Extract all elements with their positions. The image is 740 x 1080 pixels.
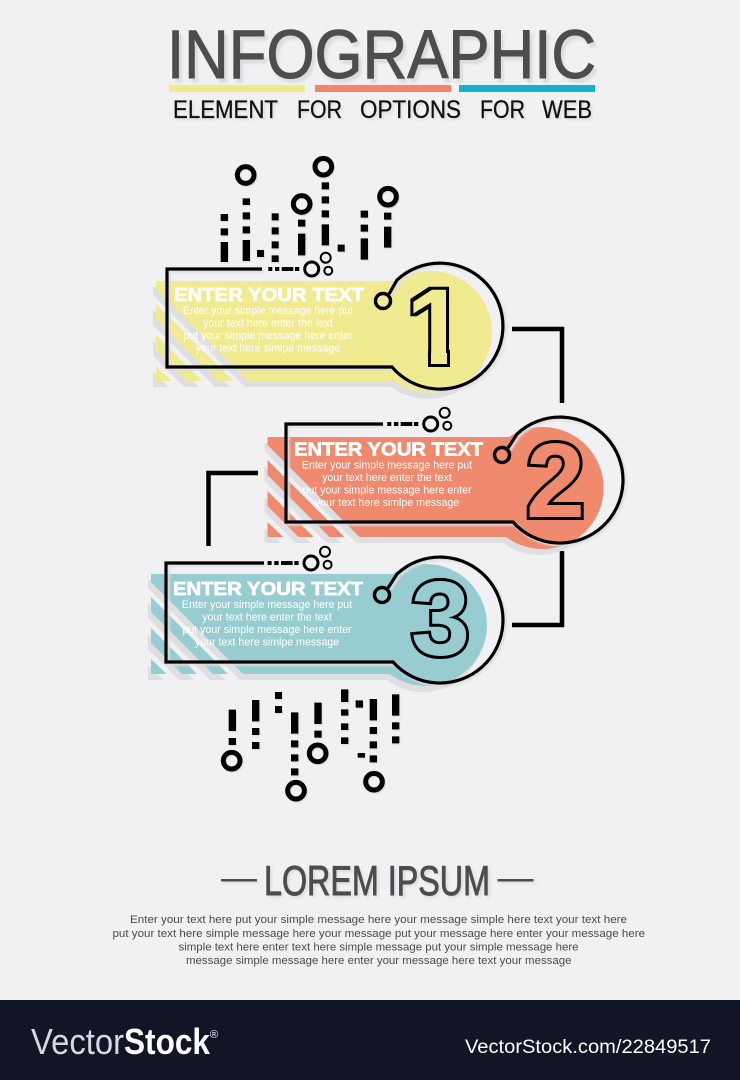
dots and bubbles [387,408,451,431]
dots and bubbles [268,547,332,570]
paragraph: simple text here enter text here simple message put your simple message here [178,942,578,954]
connector: step 1 to step 2 [512,329,562,403]
message [183,305,353,354]
paragraph: put your text here simple message here your message put your message here enter your message here [112,928,645,940]
node circle [374,588,390,602]
bottom dotted ornament with rings [223,689,399,799]
message [182,599,352,648]
footer image id: VectorStock.com/22849517 [465,1036,711,1058]
footer logo: Vector [31,1021,124,1062]
heading: ENTER YOUR TEXT [174,284,365,305]
message [302,460,472,509]
subtitle [173,96,592,124]
title: INFOGRAPHIC [167,16,596,93]
node circle [376,294,390,308]
band fill [151,564,487,686]
subtitle: FOR [480,96,525,124]
message: your text here enter the text [202,612,332,624]
subtitle: WEB [542,96,592,124]
outline frame [286,417,623,543]
outline frame [167,263,503,389]
subtitle: OPTIONS [360,96,461,124]
dots and bubbles [268,253,332,276]
message: Enter your simple message here put [183,305,353,317]
message: your text here enter the text [203,318,333,330]
number 2: 2 [526,422,585,540]
message: your text here enter the text [322,472,452,484]
footer logo: ® [210,1029,218,1041]
message: put your simple message here enter [184,330,353,342]
message: your text here simlpe message [196,342,340,354]
message: put your simple message here enter [182,624,352,636]
node circle [494,448,510,462]
footer logo: Stock [124,1021,211,1062]
band fill [156,271,492,393]
paragraph [112,914,645,967]
band fill [268,427,604,549]
top dotted ornament with rings [221,158,396,262]
connector: step 3 to step 2 [512,551,562,625]
title colour bars [169,85,595,92]
message: put your simple message here enter [302,484,472,496]
message: Enter your simple message here put [302,460,472,472]
band shadow [148,570,484,692]
subtitle: ELEMENT [173,96,278,124]
subtitle: FOR [297,96,342,124]
panel: step 1 yellow [153,253,503,399]
panel: step 3 teal [148,547,503,692]
panel: step 2 salmon [264,408,623,555]
band shadow [264,433,600,555]
heading: ENTER YOUR TEXT [294,438,484,460]
message: your text here simlpe message [315,497,459,509]
message: Enter your simple message here put [182,599,352,611]
paragraph: Enter your text here put your simple message here your message simple here text your text here [130,914,627,926]
connector: step 2 to step 3 [208,473,258,546]
lorem ipsum heading: LOREM IPSUM [264,857,490,904]
number 1: 1 [406,266,466,387]
heading: ENTER YOUR TEXT [173,578,364,599]
number 3: 3 [411,560,470,678]
outline frame [166,557,503,683]
footer band [0,1000,740,1080]
message: your text here simlpe message [195,636,339,648]
paragraph: message simple message here enter your message here text your message [186,955,572,967]
band shadow [153,277,489,399]
